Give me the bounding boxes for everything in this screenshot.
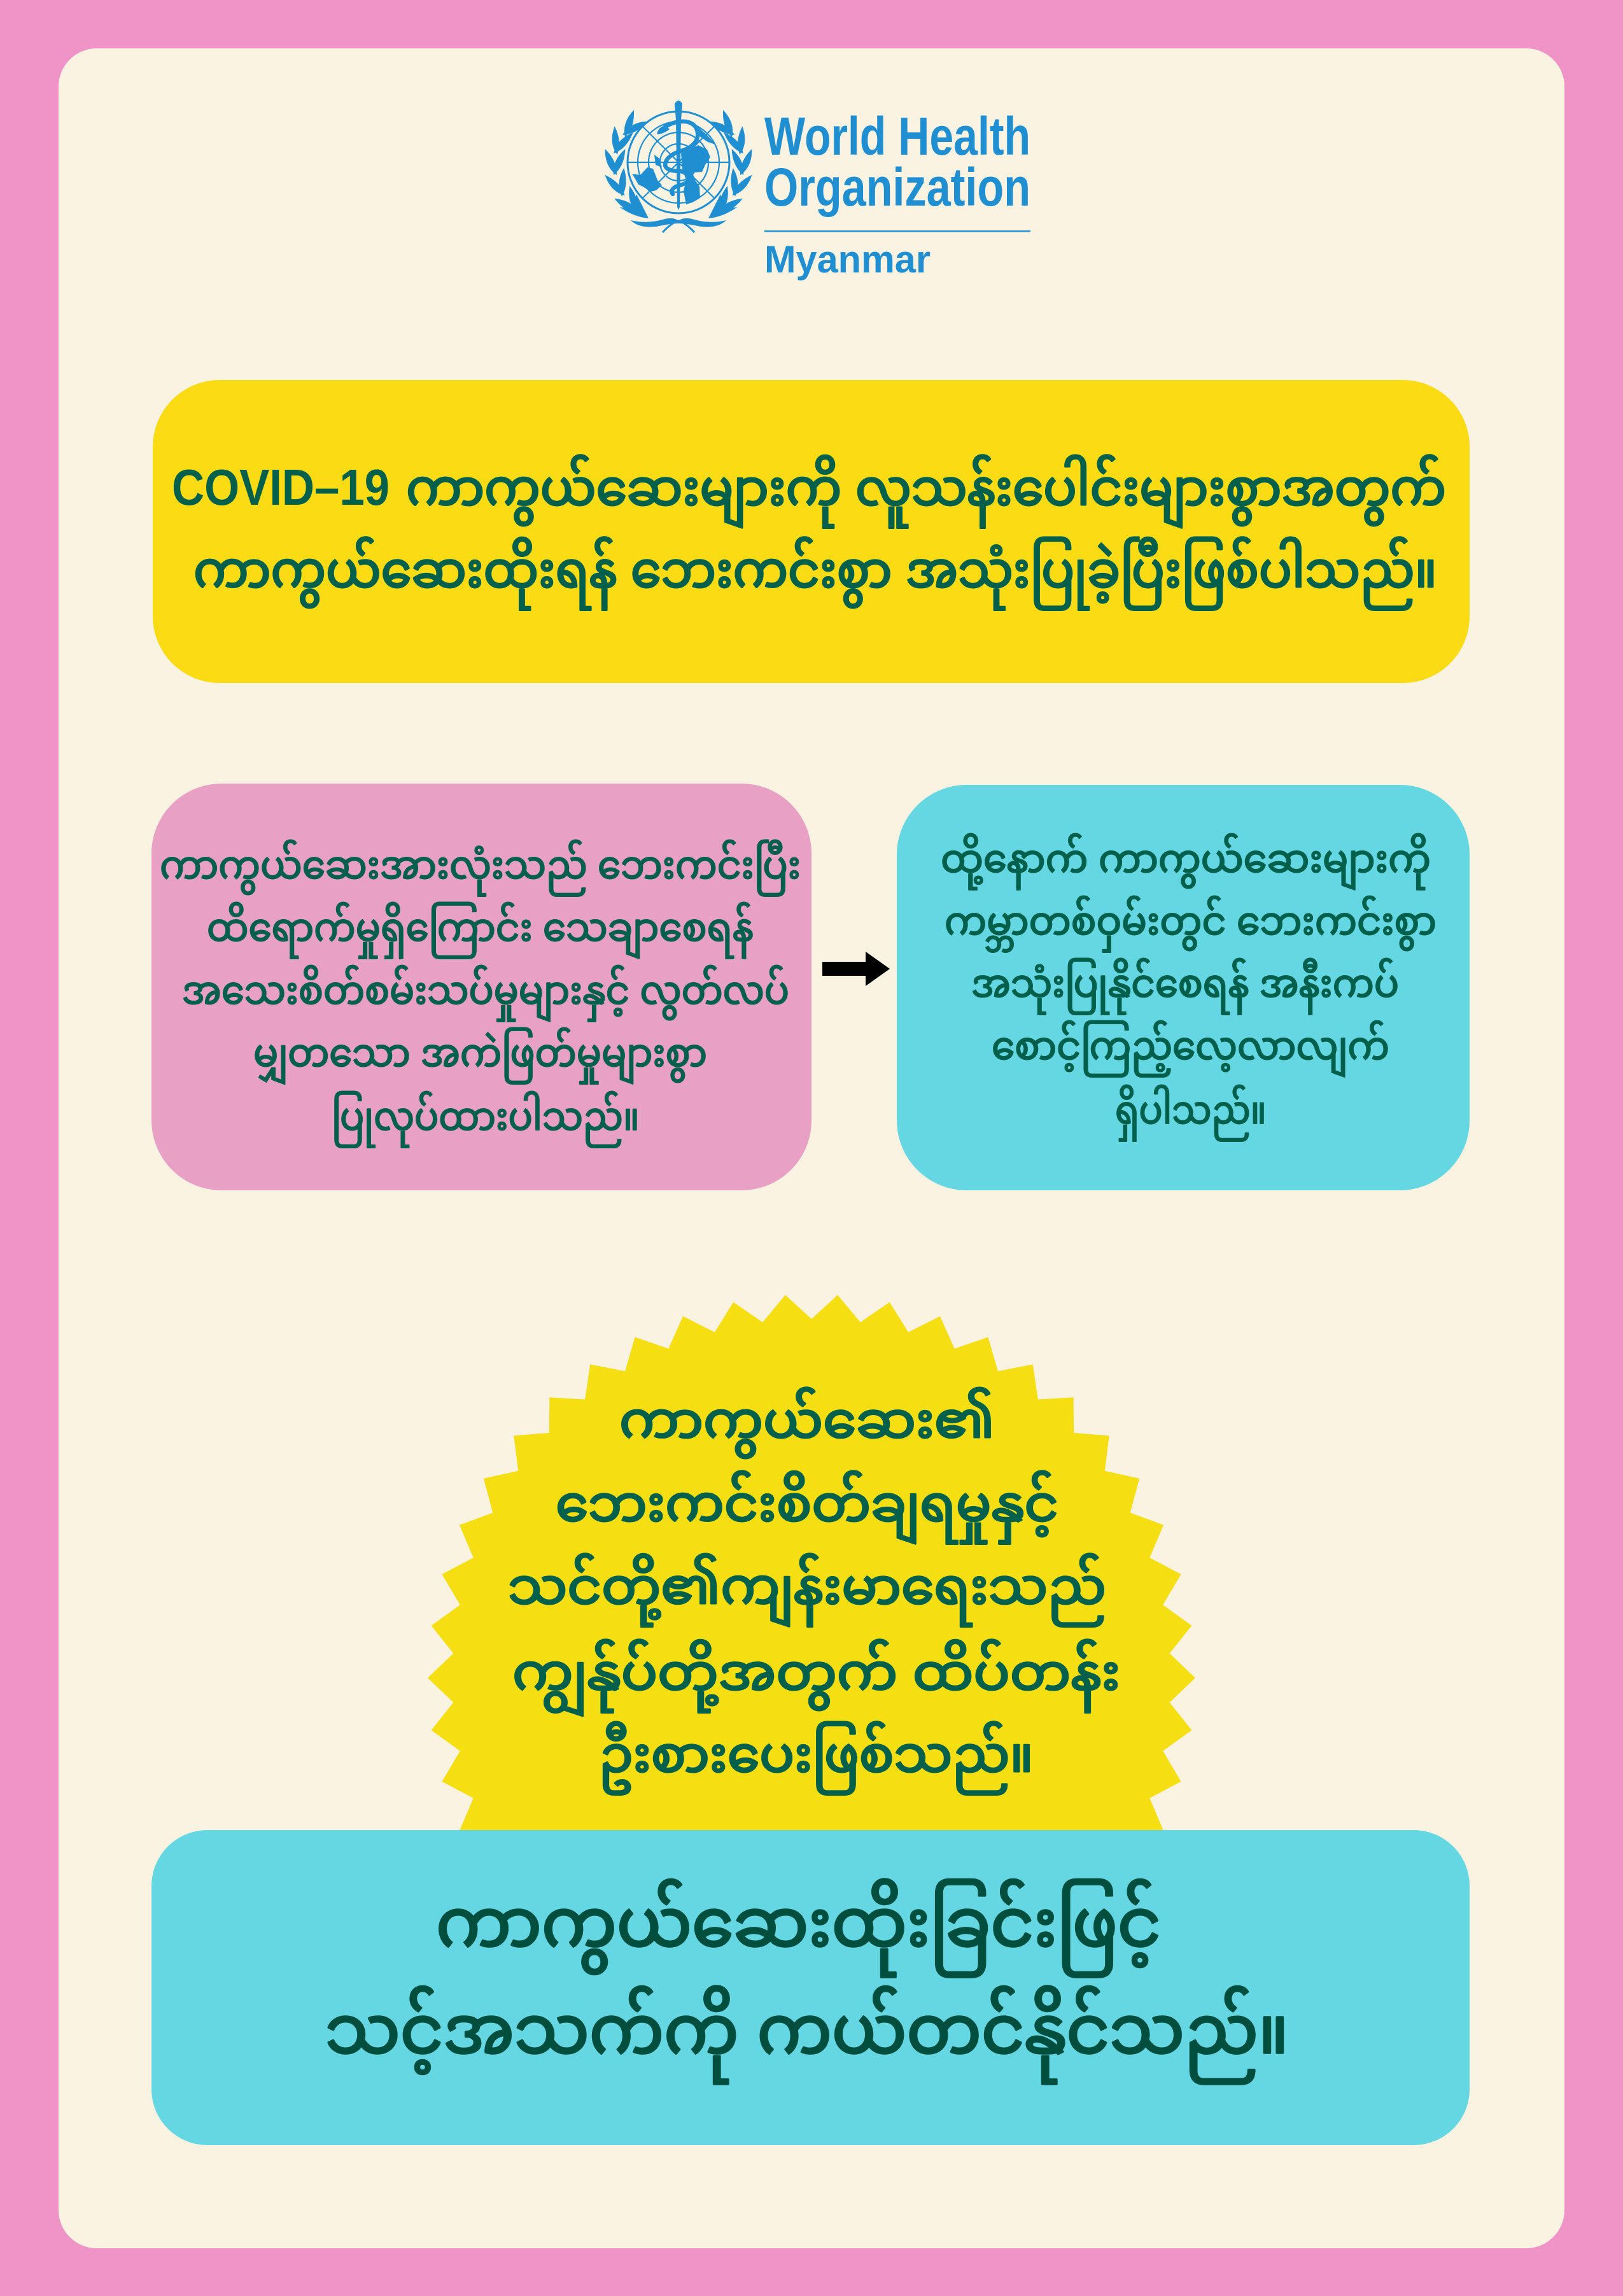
text block: monitoring: အသုံးပြုနိုင်စေရန် အနီးကပ်: [971, 957, 1399, 1015]
text block: vaccine testing: မျှတသော အကဲဖြတ်မှုများစွာ: [253, 1027, 707, 1085]
text block: safety priority: ကာကွယ်ဆေး၏: [619, 1386, 995, 1458]
text block: safety priority: ဦးစားပေးဖြစ်သည်။: [599, 1721, 1034, 1795]
panel: cyan monitoring text box: [897, 785, 1470, 1190]
text block: vaccine testing: ထိရောက်မှုရှိကြောင်း သေချာစေရန်: [207, 901, 754, 959]
heading text: ကာကွယ်ဆေးများကို လူသန်းပေါင်းများစွာအတွက်: [406, 454, 1446, 528]
text block: safety priority: သင်တို့၏ကျန်းမာရေးသည်: [508, 1553, 1106, 1627]
WHO Myanmar logo: [601, 101, 1030, 281]
arrow: [822, 952, 890, 986]
text block: vaccination saves lives: သင့်အသက်ကို ကယ်တင်နိုင်သည်။: [325, 1986, 1289, 2084]
text block: vaccine testing: အသေးစိတ်စမ်းသပ်မှုများနှင့် လွတ်လပ်: [182, 964, 789, 1022]
text block: safety priority: ဘေးကင်းစိတ်ချရမှုနှင့်: [556, 1470, 1058, 1544]
heading text: ကာကွယ်ဆေးထိုးရန် ဘေးကင်းစွာ အသုံးပြုခဲ့ပြီးဖြစ်ပါသည်။: [193, 536, 1437, 610]
logo wordmark: Myanmar: [764, 238, 931, 281]
text block: vaccination saves lives: [325, 1879, 1289, 2084]
panel: yellow starburst: [428, 1295, 1195, 1843]
logo wordmark: World Health: [764, 106, 1030, 166]
text block: monitoring: ရှိပါသည်။: [1115, 1084, 1267, 1141]
text block: monitoring: [941, 833, 1437, 1141]
icon: WHO emblem: [601, 101, 755, 232]
text block: monitoring: ကမ္ဘာတစ်ဝှမ်းတွင် ဘေးကင်းစွာ: [945, 895, 1437, 952]
text block: vaccination saves lives: ကာကွယ်ဆေးထိုးခြင်းဖြင့်: [436, 1879, 1161, 1977]
text block: monitoring: ထို့နောက် ကာကွယ်ဆေးများကို: [941, 833, 1431, 891]
panel: yellow headline banner: [153, 380, 1470, 683]
panel: cyan bottom message: [151, 1830, 1470, 2145]
logo wordmark: Organization: [764, 157, 1030, 217]
text block: vaccine testing: [160, 839, 801, 1148]
logo wordmark: [764, 106, 1030, 281]
heading text: COVID–19: [172, 459, 390, 516]
text block: vaccine testing: ကာကွယ်ဆေးအားလုံးသည် ဘေးကင်းပြီး: [160, 839, 801, 896]
text block: vaccine testing: ပြုလုပ်ထားပါသည်။: [332, 1090, 640, 1148]
text block: monitoring: စောင့်ကြည့်လေ့လာလျက်: [992, 1020, 1389, 1078]
text block: safety priority: ကျွန်ုပ်တို့အတွက် ထိပ်တန်း: [512, 1638, 1120, 1717]
panel: pink testing text box: [151, 784, 812, 1190]
heading text: [172, 454, 1446, 610]
text block: safety priority: [508, 1386, 1120, 1795]
